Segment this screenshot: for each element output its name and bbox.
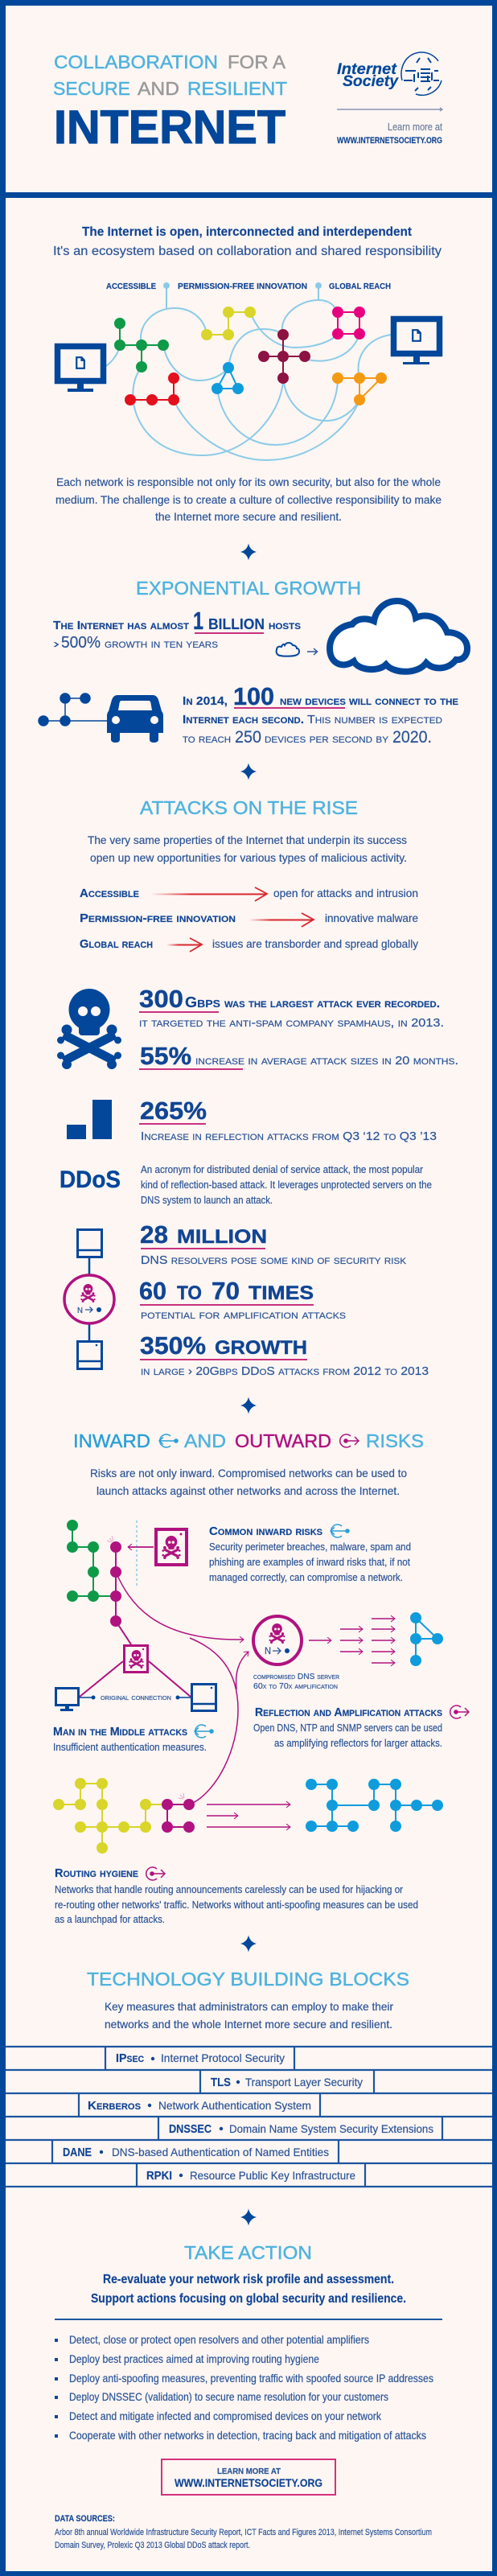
icon: left monitor [58,346,103,392]
star divider [240,544,257,560]
text: common inward risks [209,1525,411,1583]
technology intro: Key measures that administrators can employ to make their [105,2000,393,2013]
stat: 300 Gbps: was the largest attack ever recorded. [224,997,440,1010]
action list: Deploy best practices aimed at improving routing hygiene [69,2352,319,2365]
block: IPsec: Internet Protocol Security [161,2051,285,2064]
block: TLS: TLS [211,2076,231,2089]
data sources [55,2514,432,2550]
callout: learn more [162,2459,335,2495]
stat: 1 billion hosts: 1 [193,607,203,635]
risks intro: launch attacks against other networks and across the Internet. [97,1484,400,1497]
property to threat row: global reach: Global reach [80,937,153,951]
stat: 100 new devices: In 2014, [183,694,228,708]
stat: 1 billion hosts: growth in ten years [105,637,218,651]
DDoS description: An acronym for distributed denial of service attack, the most popular [141,1164,423,1175]
block: TLS: Transport Layer Security [245,2076,363,2088]
stat: 60 to 70 times [139,1277,346,1322]
red nodes [125,373,179,405]
heading: technology building blocks: TECHNOLOGY BUILDING BLOCKS [87,1969,409,1990]
stat: 1 billion hosts: 500% [61,634,101,652]
title: FOR A [228,51,286,72]
icon: amplification chain: N [77,1307,83,1315]
stat: 28 million: DNS resolvers pose some kind of security risk [141,1253,407,1267]
intro paragraph [55,475,442,523]
attacks intro: The very same properties of the Internet that underpin its success [88,833,407,846]
property labels: GLOBAL REACH [329,282,391,291]
intro heading: The Internet is open, interconnected and interdependent [82,225,413,239]
stat: 60 to 70 times: TIMES [249,1282,314,1304]
diagram: routing hygiene [54,1779,442,1853]
pink nodes [333,307,364,339]
block: DNSSEC: DNSSEC [169,2122,212,2136]
text: reflection and amplification [253,1706,469,1749]
rule [55,2319,442,2320]
green nodes [115,319,168,372]
heading: inward and outward risks: INWARD [73,1430,150,1451]
logo: Internet Society: Society [343,73,399,90]
stat: 350 percent growth [140,1331,429,1378]
heading: exponential growth: EXPONENTIAL GROWTH [136,578,361,599]
yellow nodes [202,307,255,339]
stat: 28 million: 28 [140,1220,168,1249]
heading: attacks on the rise: ATTACKS ON THE RISE [140,797,358,818]
target network [411,1613,442,1665]
icon: skull and crossbones [57,989,121,1069]
brick wall of building blocks [6,2047,492,2187]
text: routing hygiene: Networks that handle routing announcements carelessly can be used for hijacking or [55,1883,404,1895]
network diagram [58,282,439,460]
text: reflection and amplification: Reflection and Amplification attacks [255,1706,442,1719]
property to threat row: permission-free innovation: Permission-free innovation [80,911,236,925]
block: RPKI: Resource Public Key Infrastructure [190,2169,355,2182]
stat: 350 percent growth: 350% [140,1331,206,1360]
risks intro: Risks are not only inward. Compromised networks can be used to [90,1467,407,1479]
diagram: man in the middle [56,1621,216,1711]
magenta attack paths [116,1572,249,1803]
stat: 350 percent growth: GROWTH [215,1337,307,1359]
intro paragraph: the Internet more secure and resilient. [155,510,342,523]
risks intro [90,1467,407,1497]
block: Kerberos: Kerberos [88,2099,141,2113]
text: common inward risks: Security perimeter breaches, malware, spam and [209,1541,411,1553]
action list: Detect and mitigate infected and compromised devices on your network [69,2409,382,2422]
take action lead: Re-evaluate your network risk profile and assessment. [103,2273,394,2286]
callout: learn more: LEARN MORE AT [217,2467,281,2476]
action list: Deploy anti-spoofing measures, preventing traffic with spoofed source IP addresses [69,2372,433,2385]
caption: compromised DNS server [253,1672,339,1691]
action list: Detect, close or protect open resolvers and other potential amplifiers [69,2333,369,2346]
star divider [240,763,257,780]
star divider [240,1397,257,1414]
property labels [106,282,391,308]
stat: 100 new devices: 2020. [392,728,432,747]
heading: inward and outward risks [73,1430,424,1451]
intro paragraph: medium. The challenge is to create a culture of collective responsibility to make [55,493,442,506]
property labels: ACCESSIBLE [106,282,156,291]
star divider [240,2209,257,2225]
icon: small cloud to big cloud [277,601,467,672]
stat: 100 new devices: 100 [233,682,274,710]
stat: 1 billion hosts: The Internet has almost [53,619,189,632]
intro paragraph: Each network is responsible not only for its own security, but also for the whole [56,475,441,488]
block: IPsec: IPsec [116,2051,144,2065]
attacks intro: open up new opportunities for various types of malicious activity. [90,851,407,864]
block: DANE: DANE [63,2146,92,2159]
blue nodes [212,363,243,393]
stat: 100 new devices: will connect to the [349,694,458,708]
caption: compromised DNS server: 60x to 70x amplification [253,1681,338,1691]
DDoS description: kind of reflection-based attack. It leverages unprotected servers on the [141,1179,432,1191]
stat: 100 new devices: devices per second by [265,732,389,746]
stat: 100 new devices: new devices [280,694,346,708]
text: common inward risks: phishing are examples of inward risks that, if not [209,1556,410,1568]
icon: connected car [39,693,163,743]
text: routing hygiene [55,1866,418,1925]
star divider [240,1936,257,1952]
diagram: compromised DNS server: N [265,1645,271,1656]
stat: 265 percent: 265% [140,1097,207,1125]
diagram: common inward risks [68,1520,187,1626]
text: man in the middle attacks: Insufficient authentication measures. [53,1741,207,1753]
amplification arrows [309,1619,395,1663]
block: Kerberos [88,2099,311,2113]
stat: 300 Gbps: it targeted the anti-spam company spamhaus, in 2013. [139,1016,444,1030]
title: SECURE [53,78,130,99]
callout: learn more: WWW.INTERNETSOCIETY.ORG [175,2476,322,2489]
icon: right monitor [394,319,439,364]
property labels: PERMISSION-FREE INNOVATION [178,282,307,291]
stat: 28 million: MILLION [177,1226,267,1248]
orange nodes [333,373,386,405]
title: INTERNET [54,101,285,154]
stat: 1 billion hosts [53,607,301,652]
text: man in the middle attacks [53,1725,214,1753]
stat: 100 new devices: to reach [183,732,231,746]
block: Kerberos: Network Authentication System [158,2099,311,2112]
property to threat row: global reach: issues are transborder and spread globally [212,937,418,950]
stat: 100 new devices [183,682,458,747]
logo rule and link [337,108,442,146]
stat: 28 million [140,1220,407,1267]
text: routing hygiene: as a launchpad for attacks. [55,1913,165,1925]
block: DANE: DNS-based Authentication of Named Entities [112,2146,329,2158]
text: reflection and amplification: as amplifying reflectors for larger attacks. [274,1737,442,1749]
attacks intro [88,833,407,864]
action list: Deploy DNSSEC (validation) to secure name resolution for your customers [69,2390,388,2403]
stat: 1 billion hosts: hosts [269,619,301,632]
diagram: man in the middle: original connection [101,1693,171,1702]
property to threat row: accessible: Accessible [80,887,139,900]
data sources: DATA SOURCES: [55,2514,115,2524]
stat: 60 to 70 times: 70 [212,1277,240,1305]
caption: compromised DNS server: compromised DNS server [253,1672,339,1681]
property to threat row: permission-free innovation [80,911,418,927]
title: COLLABORATION [54,51,218,72]
property to threat row: permission-free innovation: innovative malware [325,911,418,924]
text: routing hygiene: re-routing other networks' traffic. Networks without anti-spoofing measures can be used [55,1899,418,1911]
stat: 60 to 70 times: TO [177,1282,202,1304]
stat: 60 to 70 times: potential for amplification attacks [141,1308,346,1322]
stat: 1 billion hosts: BILLION [208,616,265,632]
icon: bars [67,1100,112,1139]
text: routing hygiene: Routing hygiene [55,1866,138,1880]
logo rule and link: WWW.INTERNETSOCIETY.ORG [337,136,442,146]
text: man in the middle attacks: Man in the Middle attacks [53,1725,187,1739]
stat: 300 Gbps [139,985,444,1030]
stat: 55 percent [139,1042,458,1070]
stat: 55 percent: increase in average attack sizes in 20 months. [195,1054,458,1068]
stat: 300 Gbps: Gbps [185,994,220,1010]
stat: 100 new devices: Internet each second. [183,713,304,726]
action list [55,2333,433,2442]
stat: 1 billion hosts: › [53,637,60,651]
icon: DDoS label: DDoS [60,1167,121,1193]
heading: inward and outward risks: OUTWARD [235,1430,331,1451]
stat: 265 percent [139,1097,437,1143]
DDoS description [141,1164,432,1206]
diagram: compromised DNS server [253,1616,302,1665]
property to threat row: global reach [80,937,418,952]
stat: 60 to 70 times: 60 [139,1277,166,1305]
stat: 265 percent: Increase in reflection attacks from Q3 ‘12 to Q3 ’13 [141,1130,437,1143]
take action lead [91,2273,406,2306]
data sources: Domain Survey, Prolexic Q3 2013 Global DDoS attack report. [55,2541,250,2550]
heading: take action: TAKE ACTION [184,2242,312,2263]
stat: 100 new devices: 250 [235,728,261,747]
title [53,51,287,154]
stat: 100 new devices: This number is expected [307,713,442,726]
technology intro [105,2000,393,2031]
logo: Internet Society [337,52,442,95]
technology intro: networks and the whole Internet more secure and resilient. [105,2018,392,2031]
intro heading [53,225,442,258]
DDoS description: DNS system to launch an attack. [141,1195,273,1206]
title: RESILIENT [187,78,287,99]
title: AND [138,78,179,99]
heading: inward and outward risks: RISKS [366,1430,424,1451]
logo rule and link: Learn more at [388,121,442,133]
stat: 55 percent: 55% [140,1042,191,1070]
block: IPsec [116,2051,285,2065]
text: common inward risks: managed correctly, can compromise a network. [209,1571,403,1583]
stat: 300 Gbps: 300 [139,985,183,1013]
block: RPKI: RPKI [146,2169,172,2183]
text: reflection and amplification: Open DNS, NTP and SNMP servers can be used [253,1722,442,1734]
block: DNSSEC: Domain Name System Security Extensions [229,2122,433,2135]
action list: Cooperate with other networks in detection, tracing back and mitigation of attacks [69,2429,426,2442]
connecting arcs [106,300,391,460]
intro heading: It's an ecosystem based on collaboration and shared responsibility [53,245,442,258]
property to threat row: accessible [80,887,418,901]
text: common inward risks: Common inward risks [209,1525,322,1538]
logo: Internet Society: Internet [337,61,397,78]
take action lead: Support actions focusing on global security and resilience. [91,2292,406,2306]
heading: inward and outward risks: AND [184,1430,226,1451]
maroon nodes [259,330,310,383]
property to threat row: accessible: open for attacks and intrusion [273,887,418,899]
icon: amplification chain [64,1229,114,1369]
stat: 350 percent growth: in large › 20Gbps DDoS attacks from 2012 to 2013 [141,1364,429,1378]
